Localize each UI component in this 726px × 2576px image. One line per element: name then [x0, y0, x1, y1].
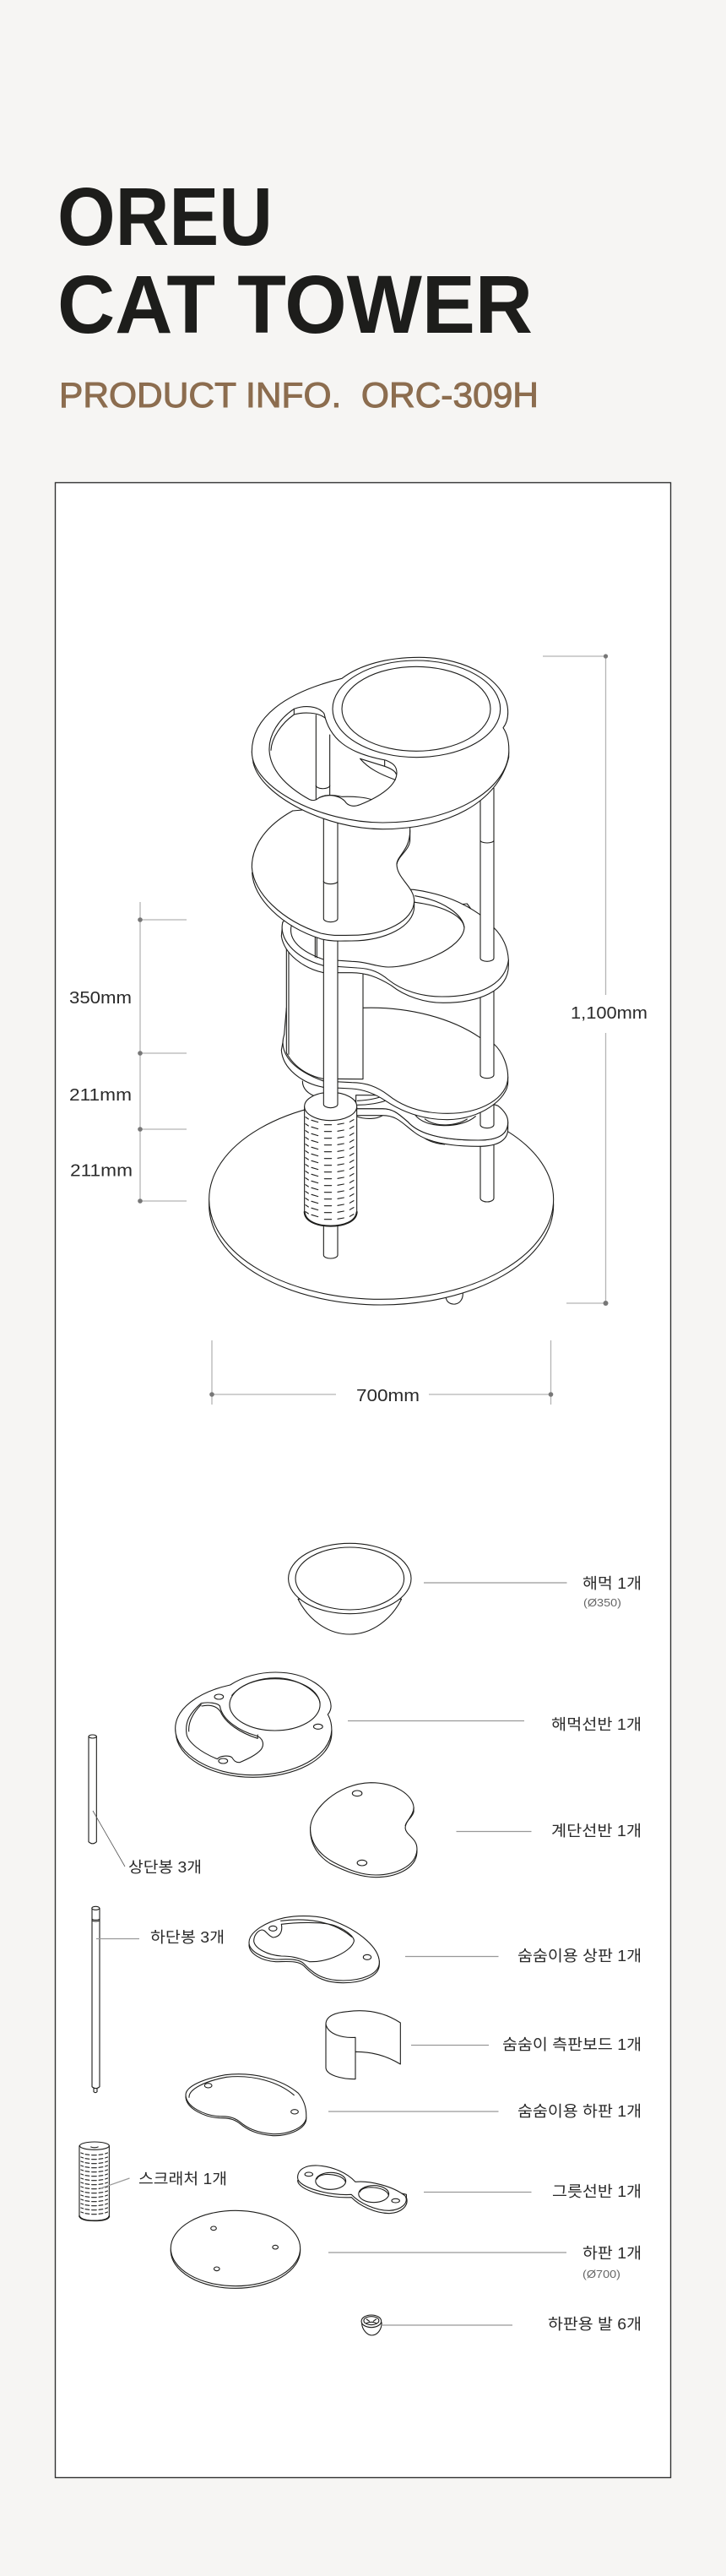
part: hiding upper plate: 숨숨이용 상판 1개: [517, 1947, 642, 1965]
tower illustration: [209, 657, 554, 1305]
dimension: heights: 211mm: [69, 1086, 132, 1105]
part: hammock bowl: [289, 1543, 642, 1634]
part: upper pole: 상단봉 3개: [128, 1858, 202, 1876]
title: [57, 171, 533, 351]
part: hammock shelf: [176, 1672, 642, 1777]
part: base plate: (Ø700): [582, 2268, 620, 2280]
dimension: heights: 350mm: [69, 989, 132, 1008]
dimension: heights: 211mm: [70, 1162, 133, 1181]
part: bowl shelf: [298, 2166, 642, 2214]
subtitle: PRODUCT INFO. ORC-309H: [59, 375, 539, 415]
part: bowl shelf: 그릇선반 1개: [552, 2182, 642, 2200]
scratcher: [305, 1092, 357, 1226]
part: stair shelf: 계단선반 1개: [551, 1822, 642, 1840]
part: hiding side board: 숨숨이 측판보드 1개: [502, 2035, 642, 2053]
part: scratcher: 스크래처 1개: [138, 2170, 227, 2187]
dimension: width: [209, 1340, 553, 1405]
panel: product diagram: [56, 483, 670, 2478]
part: base plate: 하판 1개: [582, 2244, 642, 2262]
title: OREU: [57, 171, 273, 263]
dimension: total height: [543, 654, 647, 1306]
part: hiding side board: [326, 2011, 642, 2079]
part: stair shelf: [311, 1783, 642, 1878]
part: hiding lower plate: [186, 2074, 642, 2136]
dimension: width: 700mm: [356, 1387, 420, 1405]
part: scratcher: [79, 2142, 227, 2220]
part: hammock shelf: 해먹선반 1개: [551, 1715, 642, 1733]
part: upper pole: [89, 1735, 202, 1876]
part: foot: 하판용 발 6개: [548, 2315, 642, 2333]
part: lower pole: 하단봉 3개: [150, 1928, 225, 1946]
title: CAT TOWER: [57, 258, 533, 351]
part: lower pole: [92, 1906, 225, 2093]
part: hiding upper plate: [249, 1916, 642, 1983]
top shelf: [252, 657, 509, 829]
part: hiding lower plate: 숨숨이용 하판 1개: [517, 2102, 642, 2120]
part: hammock bowl: (Ø350): [583, 1596, 621, 1609]
hammock ring: [333, 660, 501, 758]
part: foot: [361, 2315, 642, 2335]
part: base plate: [171, 2210, 642, 2288]
dimension: heights: [69, 902, 187, 1204]
part: hammock bowl: 해먹 1개: [582, 1574, 642, 1592]
dimension: total height: 1,100mm: [571, 1004, 647, 1023]
